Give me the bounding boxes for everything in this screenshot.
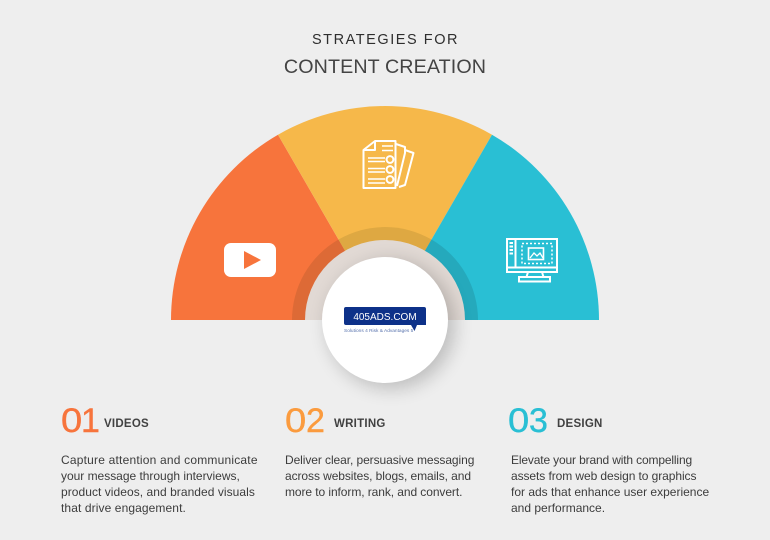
logo: 405ADS.COM [353,312,417,323]
semicircle chart [171,106,599,396]
number 02 [285,402,325,440]
centre circle [322,257,448,383]
column: design [508,402,709,515]
number 01: 0 [61,402,82,440]
column: videos [61,402,258,515]
ring: darker band [292,227,478,320]
heading: design: DESIGN [557,418,603,430]
description: that drive engagement. [61,501,186,515]
heading: writing: WRITING [334,418,386,430]
icon: documents [364,141,414,188]
logo [344,307,426,334]
number 03: 0 [508,402,529,440]
description: Elevate your brand with compelling [511,453,692,467]
heading: videos: VIDEOS [104,418,149,430]
description: more to inform, rank, and convert. [285,485,462,499]
title [284,32,486,78]
description: your message through interviews, [61,469,240,483]
ring: beige band [305,240,465,320]
description [285,453,474,499]
number 03 [508,402,548,440]
description: across websites, blogs, emails, and [285,469,471,483]
title line 2: CONTENT CREATION [284,56,486,78]
icon: monitor [507,239,557,282]
number 01: 1 [81,402,100,440]
number 03: 3 [529,402,548,440]
segment: writing [278,106,492,320]
logo: Solutions 4 Risk & Advantages 5 [344,328,414,334]
centre circle shadow [327,261,455,389]
segment: design [385,135,599,320]
description [61,453,258,515]
description: for ads that enhance user experience [511,485,709,499]
icon: video play [224,243,276,277]
description: Capture attention and communicate [61,453,258,467]
column: writing [285,402,474,499]
description: Deliver clear, persuasive messaging [285,453,474,467]
number 01 [61,402,100,440]
description: assets from web design to graphics [511,469,696,483]
description: and performance. [511,501,605,515]
number 02: 2 [306,402,325,440]
title line 1: STRATEGIES FOR [312,32,459,48]
description [511,453,709,515]
number 02: 0 [285,402,306,440]
description: product videos, and branded visuals [61,485,255,499]
segment: videos [171,135,385,320]
